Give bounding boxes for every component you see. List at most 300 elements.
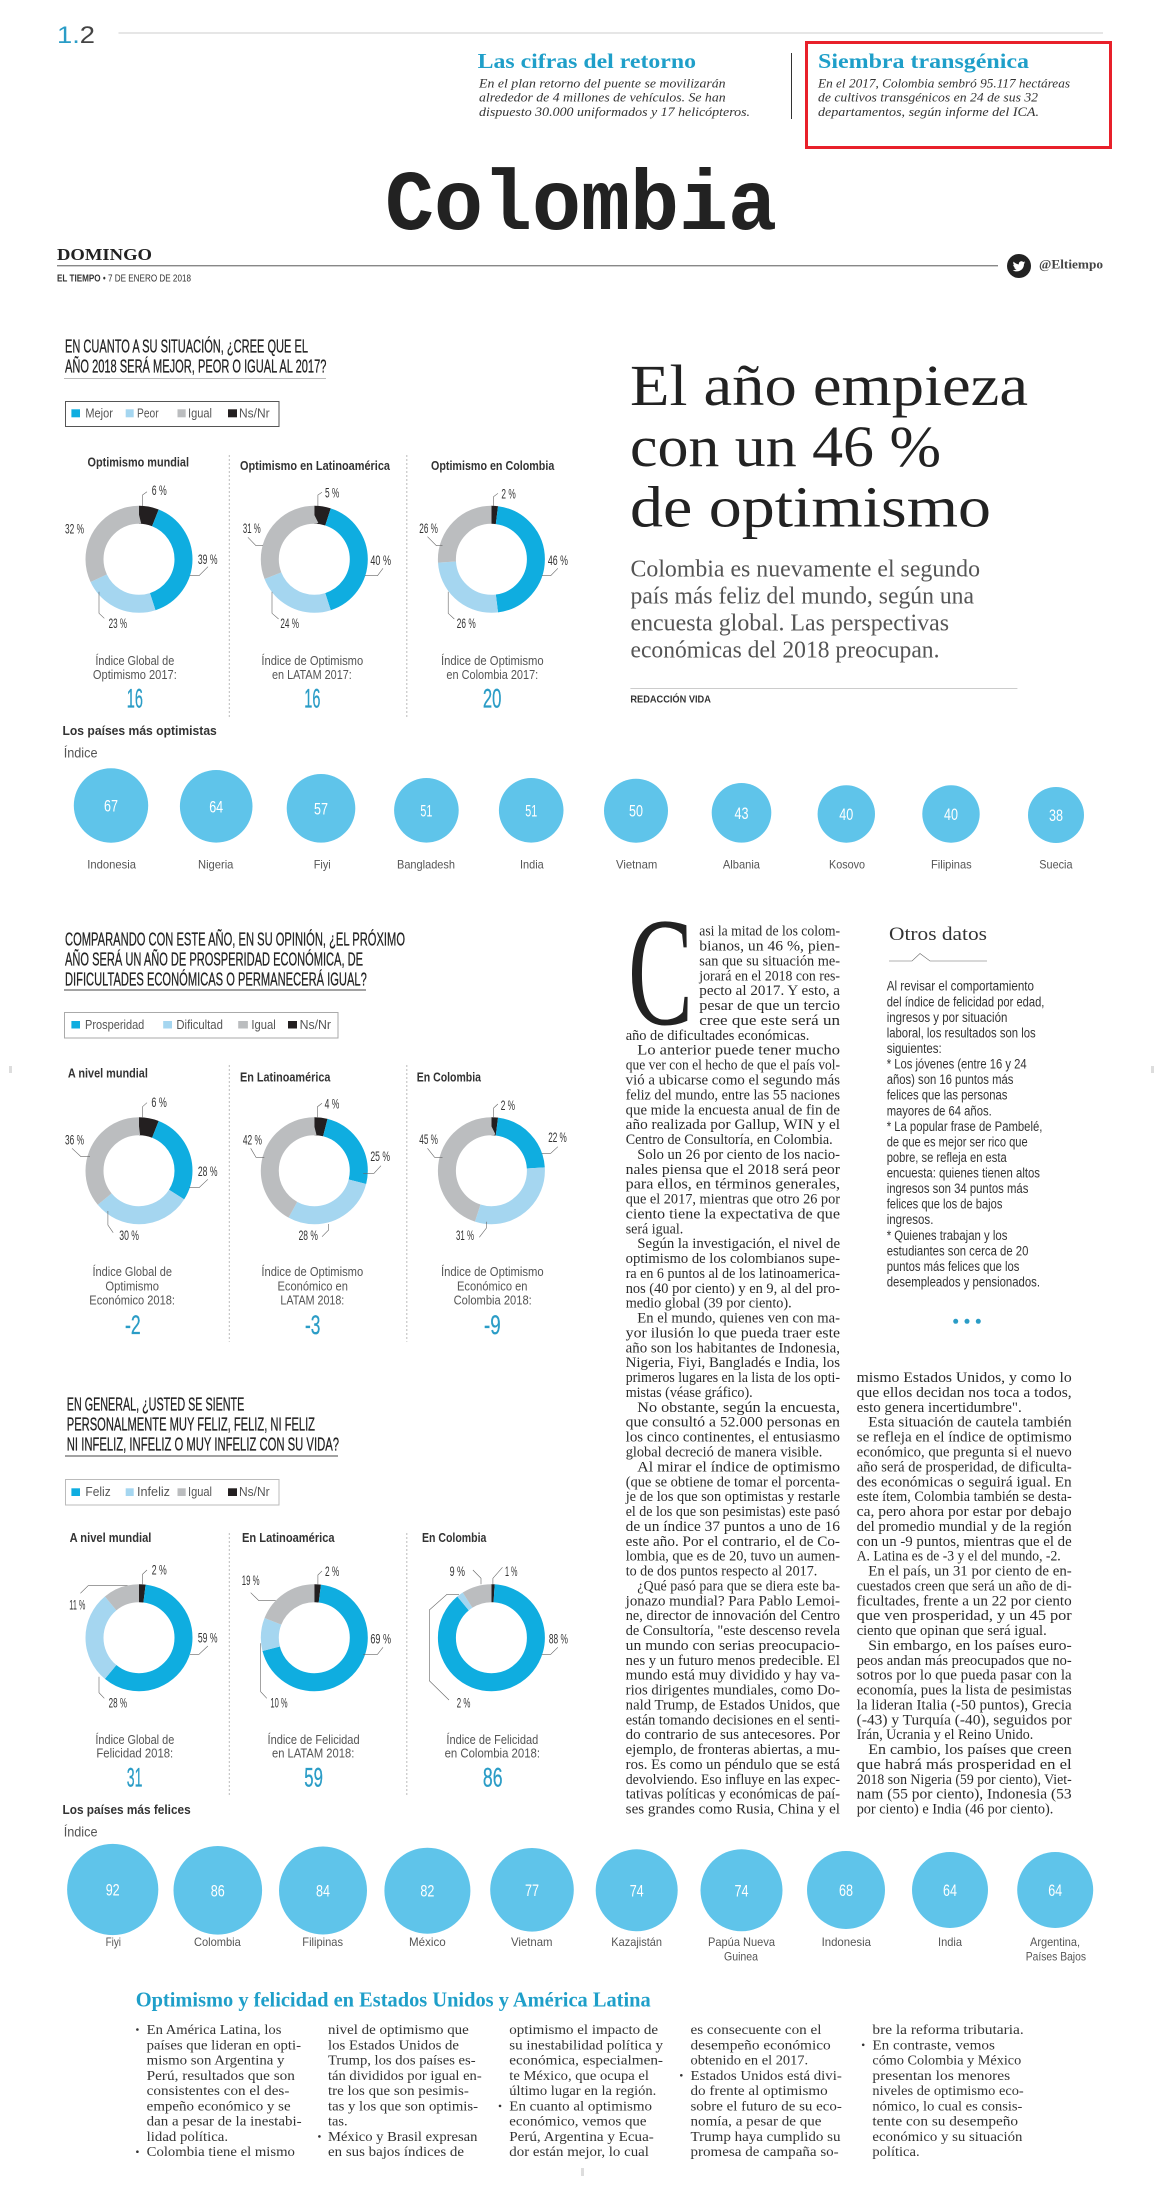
article column 1: global decreció de manera visible. xyxy=(626,1444,822,1460)
bottom column 4: sobre el futuro de su eco- xyxy=(690,2098,842,2113)
bubble: México: México xyxy=(409,1935,446,1949)
chart: Optimismo en Colombia: 26 % xyxy=(457,616,476,631)
article column 1: ses grandes como Rusia, China y el xyxy=(626,1802,840,1818)
legend: Peor xyxy=(137,406,159,420)
twitter handle: @Eltiempo xyxy=(1039,257,1103,272)
article column 1: rios dirigentes mundiales, como Do- xyxy=(626,1683,840,1699)
drop cap: C xyxy=(628,886,693,1058)
bottom column 2 xyxy=(318,2022,482,2159)
chart: Optimismo en Colombia: 26 % xyxy=(419,521,438,536)
article column 1: será igual. xyxy=(626,1221,683,1237)
bottom column 1: lidad política. xyxy=(147,2129,228,2144)
bubble: Kosovo xyxy=(818,785,875,871)
sidebar text: desempleados y pensionados. xyxy=(887,1274,1040,1290)
bubble: Nigeria xyxy=(180,770,252,871)
icon: twitter xyxy=(1007,254,1031,278)
sidebar text: ingresos y por situación xyxy=(887,1010,1007,1025)
article column 2: cuestados creen que será un año de di- xyxy=(857,1578,1072,1594)
article column 2: Esta situación de cautela también xyxy=(868,1415,1072,1431)
chart: A nivel mundial: 2 % xyxy=(152,1562,167,1578)
bubble: Albania: 43 xyxy=(734,804,748,823)
chart: En Latinoamérica: Índice de Felicidad xyxy=(268,1732,360,1747)
article column 1: Según la investigación, el nivel de xyxy=(637,1236,840,1252)
article column 2: A. Latina es de -3 y el del mundo, -2. xyxy=(857,1549,1061,1565)
article column 1: yor ilusión lo que pueda traer este xyxy=(626,1326,840,1342)
sidebar title: Otros datos xyxy=(889,924,987,945)
chart: En Latinoamérica: En Latinoamérica xyxy=(240,1071,331,1085)
article column 1: pesar de que un tercio xyxy=(699,998,840,1014)
article column 2: económico, que pregunta si el nuevo xyxy=(857,1444,1072,1460)
legend xyxy=(66,1480,279,1505)
article column 2: que habrá más prosperidad en el xyxy=(857,1757,1072,1773)
legend: Igual xyxy=(251,1018,276,1032)
article body xyxy=(625,886,1073,1818)
chart: A nivel mundial: -2 xyxy=(125,1310,141,1340)
sidebar text: siguientes: xyxy=(887,1041,942,1056)
chart: Optimismo mundial: Índice Global de xyxy=(95,653,174,668)
legend xyxy=(64,1012,338,1038)
article column 1: para ellos, en términos generales, xyxy=(626,1177,840,1193)
deck: Colombia es nuevamente el segundo xyxy=(630,557,980,583)
bottom column 1: dan a pesar de la inestabi- xyxy=(147,2114,302,2129)
article column 2: del promedio mundial y de la región xyxy=(857,1519,1072,1535)
chart: Optimismo en Colombia: 2 % xyxy=(501,486,516,502)
bottom column 2: tán divididos por igual en- xyxy=(328,2068,482,2083)
article column 2: mismo Estados Unidos, y como lo xyxy=(857,1370,1072,1386)
chart: En Latinoamérica: 25 % xyxy=(370,1149,390,1164)
chart: En Latinoamérica: -3 xyxy=(305,1310,320,1340)
article column 1: que consultó a 52.000 personas en xyxy=(626,1415,841,1431)
bottom column 3 xyxy=(499,2022,664,2159)
article column 2: que ellos decidan nos toca a todos, xyxy=(857,1385,1072,1401)
bubble: Vietnam xyxy=(604,779,668,871)
article column 1: primeros lugares en la lista de los opti- xyxy=(626,1370,840,1386)
bubble: Argentina, Países Bajos: Países Bajos xyxy=(1026,1950,1086,1964)
bubble: Suecia: Suecia xyxy=(1039,857,1073,871)
article column 2: En cambio, los países que creen xyxy=(868,1742,1073,1758)
date line: EL TIEMPO • 7 DE ENERO DE 2018 xyxy=(57,274,191,285)
chart: En Latinoamérica: 69 % xyxy=(370,1632,391,1646)
bottom column 2: nivel de optimismo que xyxy=(328,2022,469,2037)
article column 1: En el mundo, quienes ven con ma- xyxy=(637,1311,840,1327)
bubble: Fiyi xyxy=(287,774,355,871)
article column 1: nes y un futuro menos predecible. El xyxy=(626,1653,840,1669)
article column 1: de Consultoría, "este descenso revela xyxy=(626,1623,841,1639)
bottom column 3: optimismo el impacto de xyxy=(509,2022,658,2037)
bubble: México xyxy=(384,1848,470,1949)
article column 2: que ven prosperidad, y un 45 por xyxy=(857,1608,1072,1624)
chart: En Colombia: -9 xyxy=(484,1310,501,1340)
bottom column 1: consistentes con el des- xyxy=(147,2083,290,2098)
bubble: Fiyi: Fiyi xyxy=(314,857,331,871)
sidebar text: ingresos. xyxy=(887,1212,933,1227)
bubble: Nigeria: Nigeria xyxy=(198,857,234,871)
legend: Dificultad xyxy=(176,1018,223,1032)
article column 1: este año. Por el contrario, el de Co- xyxy=(626,1534,840,1550)
sidebar text: mayores de 64 años. xyxy=(887,1103,992,1118)
bubble: Kazajistán: Kazajistán xyxy=(611,1935,662,1949)
subheading: Los países más optimistas xyxy=(62,723,217,738)
bubble: Albania: Albania xyxy=(723,857,760,871)
chart: A nivel mundial xyxy=(65,1067,218,1340)
article column 1: Al mirar el índice de optimismo xyxy=(637,1459,840,1475)
article column 2: se refleja en el índice de optimismo xyxy=(857,1430,1072,1446)
bottom column 5: niveles de optimismo eco- xyxy=(872,2083,1024,2098)
sidebar text: encuesta: quienes tienen altos xyxy=(887,1166,1040,1180)
chart: En Latinoamérica: 59 xyxy=(304,1763,323,1793)
chart: Optimismo en Latinoamérica: 31 % xyxy=(243,521,261,536)
article column 2: con un -9 puntos, mientras que el de xyxy=(857,1534,1072,1550)
bubble: India: India xyxy=(938,1935,962,1949)
chart: En Latinoamérica: 19 % xyxy=(242,1573,260,1588)
bottom column 3: dor están mejor, lo cual xyxy=(509,2144,649,2159)
headline block xyxy=(630,353,1028,706)
heading xyxy=(64,929,405,990)
chart: Optimismo en Colombia: Optimismo en Colombia xyxy=(431,459,555,473)
bubble: Suecia: 38 xyxy=(1049,806,1063,825)
article column 1: ciento tiene la expectativa de que xyxy=(626,1206,840,1222)
chart: A nivel mundial: 6 % xyxy=(151,1095,167,1110)
legend: Igual xyxy=(188,1485,212,1499)
chart: A nivel mundial: 31 xyxy=(127,1763,142,1793)
bottom column 1: mismo son Argentina y xyxy=(147,2052,285,2068)
bubble: Argentina, Países Bajos: Argentina, xyxy=(1030,1935,1080,1949)
article column 2: economía, pues la lista de pesimistas xyxy=(857,1683,1072,1699)
bubble: Indonesia xyxy=(807,1851,885,1949)
article column 1: de un índice 37 puntos a uno de 16 xyxy=(626,1519,840,1535)
article column 2: la lideran Italia (-50 puntos), Grecia xyxy=(857,1698,1072,1714)
chart: Optimismo mundial: 23 % xyxy=(109,616,127,631)
chart: En Colombia: en Colombia 2018: xyxy=(445,1747,540,1761)
sidebar text: laboral, los resultados son los xyxy=(887,1025,1036,1040)
bottom column 4: promesa de campaña so- xyxy=(690,2144,839,2159)
article column 1: Lo anterior puede tener mucho xyxy=(637,1043,840,1059)
section title: Colombia: Colombia xyxy=(385,158,777,255)
article column 1: los cinco continentes, el entusiasmo xyxy=(626,1430,840,1446)
heading: NI INFELIZ, INFELIZ O MUY INFELIZ CON SU VIDA? xyxy=(67,1435,339,1455)
legend: Ns/Nr xyxy=(300,1018,331,1032)
chart: En Latinoamérica: 10 % xyxy=(270,1696,288,1710)
chart: A nivel mundial: Felicidad 2018: xyxy=(96,1747,173,1761)
bubble: Colombia xyxy=(174,1846,262,1949)
panel: Estados Unidos y América Latina xyxy=(136,1988,1024,2159)
heading: AÑO 2018 SERÁ MEJOR, PEOR O IGUAL AL 2017? xyxy=(65,355,326,376)
bottom column 4: es consecuente con el xyxy=(690,2022,822,2037)
chart: Optimismo en Latinoamérica: en LATAM 2017: xyxy=(272,668,352,682)
axis label: Índice xyxy=(64,744,98,760)
chart: En Colombia: En Colombia xyxy=(422,1531,487,1545)
chart: Optimismo en Colombia: en Colombia 2017: xyxy=(446,668,538,682)
article column 1: año de dificultades económicas. xyxy=(626,1028,809,1044)
article column 1: Solo un 26 por ciento de los nacio- xyxy=(637,1147,840,1163)
article column 1: jorará en el 2018 con res- xyxy=(698,968,840,984)
chart: En Colombia: 2 % xyxy=(501,1098,515,1113)
bottom column 3: te México, que ocupa el xyxy=(509,2068,649,2083)
bottom column 4 xyxy=(680,2022,842,2159)
headline: con un 46 % xyxy=(630,414,941,479)
bubble: Filipinas: Filipinas xyxy=(931,857,972,871)
chart: A nivel mundial: Económico 2018: xyxy=(89,1293,175,1307)
article column 1: Nigeria, Fiyi, Bangladés e India, los xyxy=(626,1355,840,1371)
bubble: India xyxy=(499,778,564,871)
chart: Optimismo en Colombia xyxy=(419,459,568,714)
bubble: Albania xyxy=(712,783,771,871)
article column 1: Centro de Consultoría, en Colombia. xyxy=(626,1132,833,1148)
section day: DOMINGO: DOMINGO xyxy=(57,245,152,264)
chart: A nivel mundial: A nivel mundial xyxy=(68,1067,148,1081)
sidebar text: del índice de felicidad por edad, xyxy=(887,994,1044,1009)
bubble: Vietnam: Vietnam xyxy=(511,1935,552,1949)
heading xyxy=(64,335,326,379)
article column 1: ne, director de innovación del Centro xyxy=(626,1608,840,1624)
chart: Optimismo en Latinoamérica: 24 % xyxy=(280,616,299,631)
brief: Siembra transgénica: En el 2017, Colombia sembró 95.117 hectáreas xyxy=(817,76,1070,90)
chart: A nivel mundial: 36 % xyxy=(65,1132,84,1148)
page header xyxy=(57,22,1110,285)
byline: REDACCIÓN VIDA xyxy=(630,693,711,706)
bottom column 5: económico y su situación xyxy=(872,2129,1023,2144)
chart: En Latinoamérica xyxy=(242,1531,391,1793)
legend xyxy=(66,402,279,426)
bottom column 5: cómo Colombia y México xyxy=(872,2052,1021,2068)
chart: Optimismo en Colombia: 20 xyxy=(483,684,501,714)
ornament: three dots xyxy=(953,1319,981,1324)
article column 1: que ver con el hecho de que el país vol- xyxy=(626,1058,840,1074)
article column 2: (-43) y Turquía (-40), seguidos por xyxy=(857,1712,1072,1728)
chart: Optimismo mundial: 16 xyxy=(127,684,143,714)
bubble: Papúa Nueva Guinea: Guinea xyxy=(724,1950,758,1964)
bottom column 2: Trump, los dos países es- xyxy=(328,2052,476,2068)
bottom column 3: En cuanto al optimismo xyxy=(509,2098,652,2113)
bubble: Suecia xyxy=(1028,787,1084,871)
chart: En Latinoamérica: Económico en xyxy=(278,1280,348,1294)
chart: En Colombia: Económico en xyxy=(457,1280,528,1294)
chart: A nivel mundial: 59 % xyxy=(198,1630,218,1646)
legend: Igual xyxy=(188,406,212,420)
article column 1: (que se obtiene de tomar el porcenta- xyxy=(626,1474,840,1490)
chart: A nivel mundial: Índice Global de xyxy=(92,1264,172,1279)
bottom column 3: último lugar en la región. xyxy=(509,2083,656,2098)
bottom column 2: en sus bajos índices de xyxy=(328,2144,464,2159)
deck: país más feliz del mundo, según una xyxy=(630,583,974,609)
article column 1: medio global (39 por ciento). xyxy=(626,1296,792,1312)
article column 1: que mide la encuesta anual de fin de xyxy=(626,1102,840,1118)
article column 1: ros. Es como un péndulo que se está xyxy=(626,1757,841,1773)
sidebar text: * La popular frase de Pambelé, xyxy=(887,1119,1042,1134)
article column 1: nald Trump, de Estados Unidos, que xyxy=(626,1698,840,1714)
sidebar text: felices que las personas xyxy=(887,1088,1008,1103)
article column 1 xyxy=(625,924,841,1818)
chart: Optimismo en Latinoamérica: 16 xyxy=(304,684,320,714)
chart: En Colombia: 22 % xyxy=(548,1130,567,1145)
bottom column 3: económica, especialmen- xyxy=(509,2052,664,2068)
article column 1: tativas políticas y económicas de paí- xyxy=(626,1787,840,1803)
brief: Las cifras del retorno: Las cifras del retorno xyxy=(478,49,696,73)
chart: En Colombia: 88 % xyxy=(549,1632,568,1646)
chart: Optimismo mundial: Optimismo mundial xyxy=(88,456,189,470)
chart: Optimismo mundial xyxy=(65,456,218,714)
article column 2: peos andan más preocupados que no- xyxy=(857,1653,1072,1669)
heading: EN GENERAL, ¿USTED SE SIENTE xyxy=(67,1395,244,1415)
bubble: Fiyi: 57 xyxy=(314,799,328,818)
bubble: Kosovo: 40 xyxy=(839,805,853,824)
article column 1: ¿Qué pasó para que se diera este ba- xyxy=(637,1578,840,1594)
red highlight box xyxy=(806,42,1110,148)
bubble: Colombia: 86 xyxy=(211,1881,225,1900)
bubble: India xyxy=(912,1852,988,1949)
bottom column 1: Colombia tiene el mismo xyxy=(147,2144,295,2159)
heading xyxy=(65,1395,339,1456)
bottom column 4: desempeño económico xyxy=(690,2037,831,2052)
brief: Siembra transgénica: de cultivos transgénicos en 24 de sus 32 xyxy=(818,91,1038,105)
bubble: Indonesia: 67 xyxy=(104,796,118,816)
article column 2: ca, pero ahora por estar por debajo xyxy=(857,1504,1072,1520)
chart: En Colombia: En Colombia xyxy=(417,1071,482,1085)
bubble: Fiyi xyxy=(67,1844,158,1949)
article column 2: des económicas o seguirá igual. En xyxy=(857,1474,1072,1490)
bubble: Papúa Nueva Guinea: Papúa Nueva xyxy=(708,1935,775,1949)
sidebar text: ingresos son 34 puntos más xyxy=(887,1181,1029,1196)
chart: En Latinoamérica: 42 % xyxy=(243,1132,262,1148)
brief: Siembra transgénica: Siembra transgénica xyxy=(818,49,1030,73)
brief: Siembra transgénica xyxy=(817,49,1070,119)
chart: Optimismo en Latinoamérica: Optimismo en Latinoamérica xyxy=(240,459,391,473)
chart: Optimismo en Latinoamérica: 40 % xyxy=(370,553,391,568)
panel: survey 2 economy xyxy=(64,929,567,1342)
bottom column 4: obtenido en el 2017. xyxy=(690,2052,808,2068)
article column 1: do contrario de sus antecesores. Por xyxy=(626,1727,840,1743)
chart: En Colombia: Índice de Optimismo xyxy=(441,1264,544,1279)
bubble: Filipinas: Filipinas xyxy=(302,1935,343,1949)
bubble: Nigeria: 64 xyxy=(209,797,223,816)
article column 2: este ítem, Colombia también se desta- xyxy=(857,1489,1072,1505)
article column 1: año realizada por Gallup, WIN y el xyxy=(626,1117,840,1133)
bubble: Papúa Nueva Guinea xyxy=(700,1849,782,1964)
article column 1: asi la mitad de los colom- xyxy=(699,924,840,940)
legend: Ns/Nr xyxy=(239,1485,270,1499)
chart: Optimismo mundial: 32 % xyxy=(65,521,84,536)
bubble: Indonesia: Indonesia xyxy=(87,857,136,871)
chart: Optimismo en Latinoamérica: Índice de Optimismo xyxy=(261,653,363,668)
brief: Las cifras del retorno: alrededor de 4 millones de vehículos. Se han xyxy=(479,91,726,105)
chart: Optimismo mundial: Optimismo 2017: xyxy=(93,668,177,682)
bubble: Indonesia: Indonesia xyxy=(822,1935,871,1949)
article column 2: nam (55 por ciento), Indonesia (53 xyxy=(857,1787,1072,1803)
sidebar text: años) son 16 puntos más xyxy=(887,1072,1014,1087)
article column 1: vió a ubicarse como el segundo más xyxy=(626,1072,840,1088)
chart: En Latinoamérica: LATAM 2018: xyxy=(280,1293,344,1307)
bottom column 3: económico, vemos que xyxy=(509,2114,647,2129)
bubble: Bangladesh xyxy=(394,778,459,871)
article column 1: No obstante, según la encuesta, xyxy=(637,1400,840,1416)
bubble: Bangladesh: 51 xyxy=(420,801,432,820)
brief: Las cifras del retorno: En el plan retorno del puente se movilizarán xyxy=(478,76,726,90)
chart: Optimismo en Colombia: 46 % xyxy=(548,553,568,568)
chart: Optimismo en Latinoamérica: 5 % xyxy=(325,486,339,500)
bottom column 5: tente con su desempeño xyxy=(872,2114,1018,2129)
article column 1: un mundo con serias preocupacio- xyxy=(626,1638,840,1654)
bubble: Fiyi: Fiyi xyxy=(106,1935,121,1949)
chart: En Colombia: 86 xyxy=(483,1763,502,1793)
bottom column 5 xyxy=(862,2022,1024,2159)
article column 1: bianos, un 46 %, pien- xyxy=(699,939,840,955)
chart: A nivel mundial: 30 % xyxy=(119,1228,139,1243)
chart: En Colombia: 2 % xyxy=(457,1696,470,1710)
article column 2: ficultades, frente a un 22 por ciento xyxy=(857,1593,1072,1609)
bottom column 3: su inestabilidad política y xyxy=(509,2037,663,2052)
article column 2: esto genera incertidumbre". xyxy=(857,1400,1022,1416)
sidebar text: pobre, se refleja en esta xyxy=(887,1150,1007,1165)
article column 1: nos (40 por ciento) y en 9, al del pro- xyxy=(626,1281,840,1297)
chart: En Latinoamérica: Índice de Optimismo xyxy=(261,1264,363,1279)
panel heading: Optimismo y felicidad en Estados Unidos y América Latina xyxy=(136,1988,651,2012)
bubble: Fiyi: 92 xyxy=(106,1880,120,1900)
bubble: Kosovo: Kosovo xyxy=(829,857,865,871)
bottom column 4: do frente al optimismo xyxy=(690,2083,828,2098)
legend: Infeliz xyxy=(137,1485,170,1499)
chart: En Colombia: Índice de Felicidad xyxy=(446,1732,538,1747)
bottom column 2: tas. xyxy=(328,2114,348,2129)
article column 1: jonazo mundial? Para Pablo Lemoi- xyxy=(625,1593,840,1609)
chart: A nivel mundial: 11 % xyxy=(69,1598,85,1612)
headline: El año empieza xyxy=(630,353,1028,418)
bubble: Argentina, Países Bajos: 64 xyxy=(1048,1881,1062,1900)
page number: 1.2 xyxy=(57,22,95,49)
chart: En Colombia xyxy=(422,1531,568,1793)
article column 1: pecto al 2017. Y esto, a xyxy=(699,983,841,999)
article column 1: lombia, que es de 20, tuvo un aumen- xyxy=(626,1549,840,1565)
bottom column 2: México y Brasil expresan xyxy=(328,2129,478,2144)
bubble: Vietnam: 77 xyxy=(525,1881,539,1900)
chart: A nivel mundial: 28 % xyxy=(109,1696,127,1710)
bottom column 4: Estados Unidos está divi- xyxy=(690,2068,842,2083)
bubble: Filipinas xyxy=(279,1846,367,1949)
deck: económicas del 2018 preocupan. xyxy=(630,637,940,663)
brief: Las cifras del retorno xyxy=(478,49,750,119)
bottom column 1: Perú, resultados que son xyxy=(147,2068,295,2083)
article column 1: están tomando decisiones en el senti- xyxy=(626,1712,840,1728)
chart: A nivel mundial: 28 % xyxy=(198,1164,218,1179)
heading: EN CUANTO A SU SITUACIÓN, ¿CREE QUE EL xyxy=(65,335,308,356)
panel: most optimistic countries xyxy=(62,723,1084,871)
article column 1: año son los habitantes de Indonesia, xyxy=(626,1340,840,1356)
chart: En Colombia: 1 % xyxy=(505,1564,518,1579)
bubble: Vietnam: 50 xyxy=(629,802,643,821)
chart: En Colombia: Colombia 2018: xyxy=(454,1293,532,1307)
panel: survey 3 happiness xyxy=(65,1395,568,1797)
bottom column 5: presentan los menores xyxy=(872,2068,1010,2083)
legend: Prosperidad xyxy=(85,1018,144,1032)
sidebar text: puntos más felices que los xyxy=(887,1259,1020,1274)
article column 1: optimismo de los colombianos supe- xyxy=(626,1251,840,1267)
bubble: Bangladesh: Bangladesh xyxy=(397,857,455,871)
bubble: Vietnam xyxy=(490,1848,574,1949)
bottom column 5: nómico, lo cual es consis- xyxy=(872,2098,1023,2113)
bubble: Filipinas xyxy=(922,785,980,871)
sidebar text: estudiantes son cerca de 20 xyxy=(887,1243,1028,1258)
bottom column 5: En contraste, vemos xyxy=(872,2037,995,2052)
bottom column 2: tre los que son pesimis- xyxy=(328,2083,469,2098)
bubble: Kazajistán: 74 xyxy=(630,1881,644,1900)
bubble: Filipinas: 40 xyxy=(944,805,958,824)
chart: Optimismo en Latinoamérica xyxy=(240,459,391,714)
brief: Siembra transgénica: departamentos, según informe del ICA. xyxy=(818,105,1039,119)
bottom column 4: Trump haya cumplido su xyxy=(690,2129,841,2144)
bubble: India: India xyxy=(520,857,544,871)
bottom column 3: Perú, Argentina y Ecua- xyxy=(509,2129,654,2144)
article column 2: sotros por lo que pueda pasar con la xyxy=(857,1668,1072,1684)
bottom column 2: tas y los que son optimis- xyxy=(328,2098,479,2113)
